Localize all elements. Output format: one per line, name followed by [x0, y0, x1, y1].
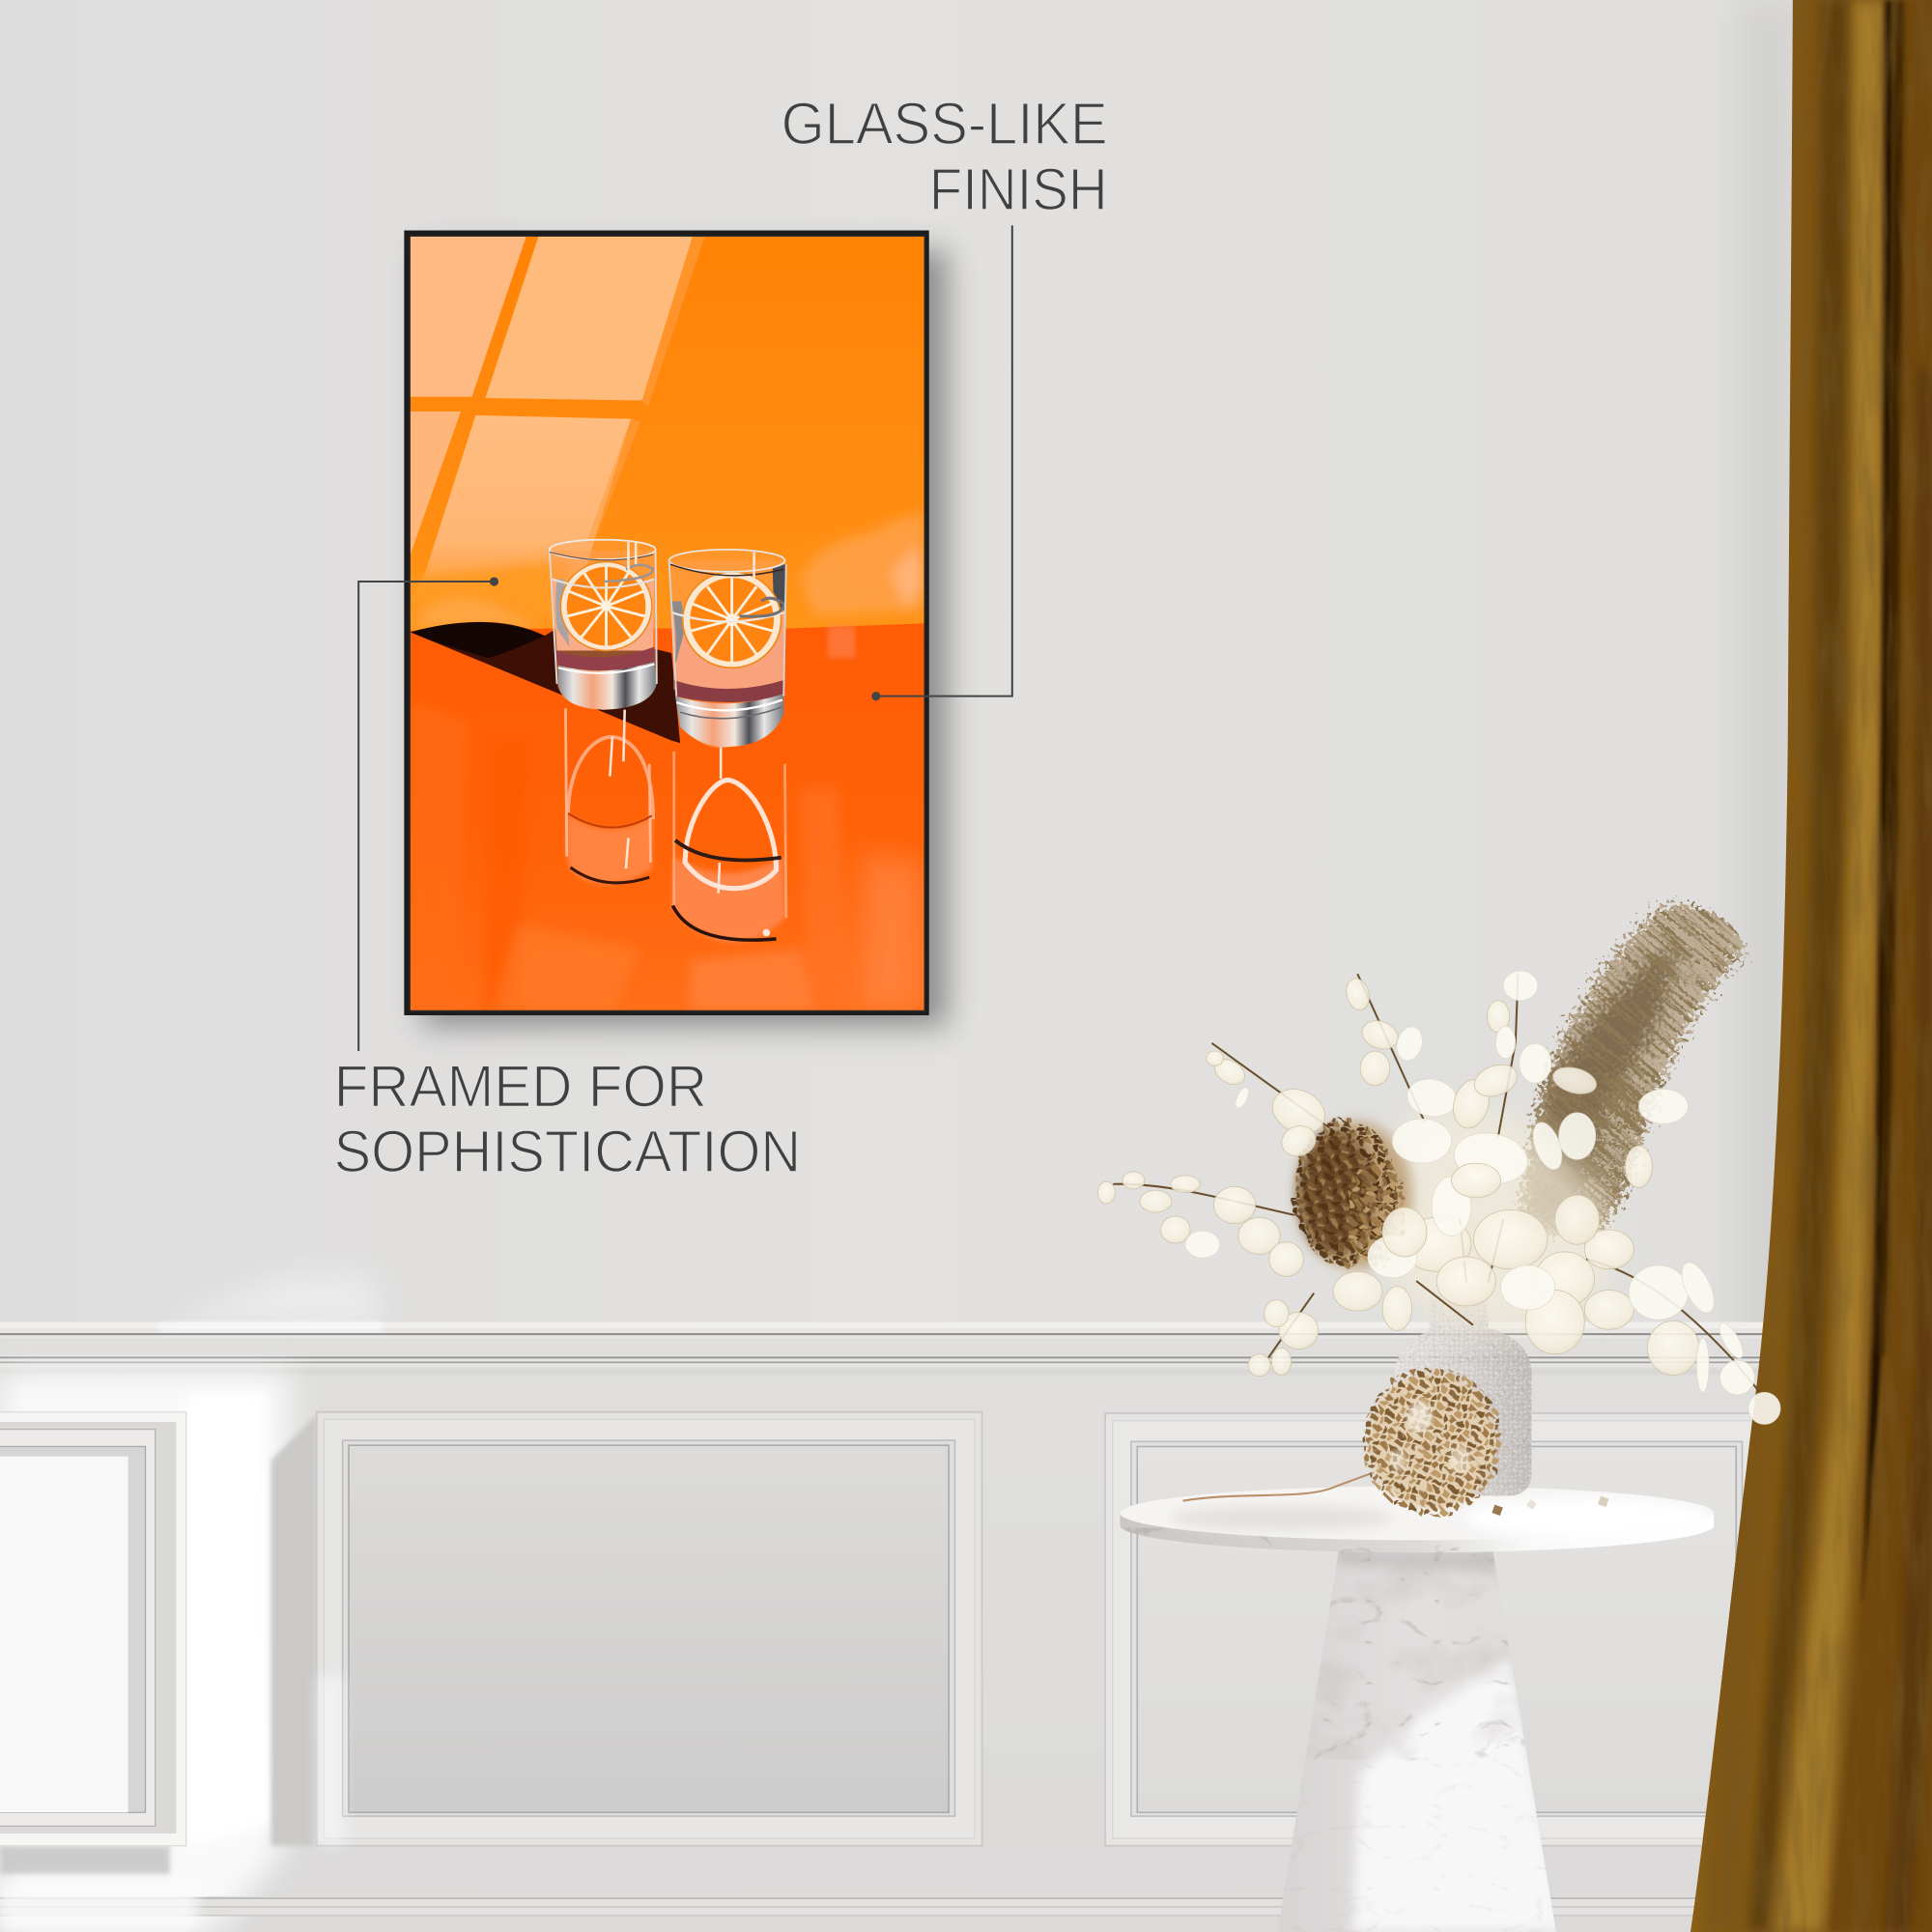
- callout heading: glass-like finish: [781, 91, 1108, 222]
- leader line: glass-like finish: [871, 225, 1012, 700]
- centre wall panel: [271, 1412, 982, 1846]
- artwork: [411, 237, 924, 1010]
- frame cast shadow: [423, 250, 948, 1026]
- curtain dark fold: [1747, 0, 1851, 1932]
- reflection: left glass: [565, 708, 653, 884]
- pedestal: [1269, 1540, 1565, 1932]
- orange slice: [683, 572, 781, 668]
- callout heading: glass-like finish: GLASS-LIKE: [781, 91, 1108, 156]
- table shadow: [411, 622, 680, 743]
- orange slice: [560, 562, 652, 650]
- chair rail moulding: [0, 1322, 1932, 1374]
- branches: [1114, 975, 1762, 1395]
- hydrangea in bouquet: [1293, 1119, 1412, 1269]
- tabletop: [1115, 1479, 1719, 1559]
- baseboard rail: [0, 1886, 1932, 1932]
- right wall panel: [1105, 1413, 1771, 1846]
- framed painting: [404, 231, 948, 1027]
- callout heading: framed for sophistication: SOPHISTICATION: [334, 1119, 801, 1184]
- sunlight on lower wall: [0, 1373, 290, 1932]
- callout heading: glass-like finish: FINISH: [929, 156, 1108, 222]
- window light panes: [411, 237, 705, 604]
- marble side table: [1115, 1472, 1719, 1932]
- callout heading: framed for sophistication: [334, 1053, 801, 1184]
- orange table surface: [411, 623, 924, 1010]
- left wall panel: [0, 1412, 186, 1874]
- fallen petals on table: [1492, 1496, 1609, 1516]
- left glass: [550, 540, 657, 710]
- reflection: right glass: [672, 747, 786, 942]
- right glass: [669, 550, 786, 749]
- leader line: framed for sophistication: [358, 577, 498, 1051]
- glass vase: [1386, 1282, 1540, 1503]
- curtain: [1676, 0, 1932, 1932]
- pampas plume: [1428, 799, 1880, 1282]
- hydrangea on table: [1361, 1368, 1502, 1516]
- honesty leaves: [1097, 971, 1780, 1424]
- black frame: [404, 231, 929, 1015]
- callout heading: framed for sophistication: FRAMED FOR: [334, 1053, 707, 1119]
- cream bloom mass: [1380, 1106, 1611, 1330]
- dried bouquet: [1097, 799, 1880, 1516]
